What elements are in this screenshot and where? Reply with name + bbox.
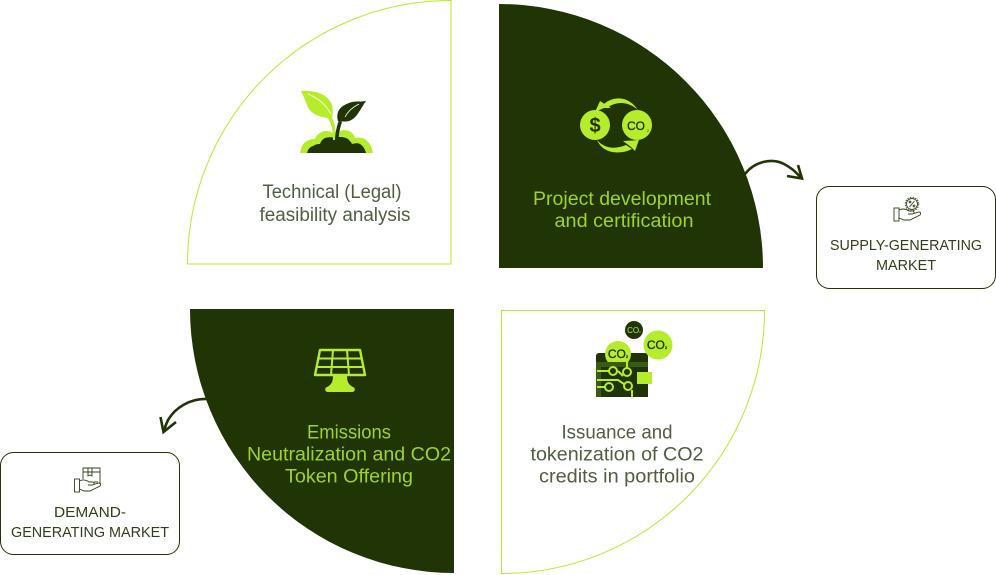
- label: supply-generating market: SUPPLY-GENERATING: [830, 238, 982, 254]
- arrow: to demand market: [160, 399, 208, 432]
- panel: project development: [499, 4, 763, 268]
- panel: technical feasibility: [188, 0, 451, 264]
- icon: wallet circuit with CO2 bubbles: CO2: [627, 326, 641, 335]
- icon: dollar and CO2 cycle: CO: [627, 119, 645, 133]
- icon: dollar and CO2 cycle: 2: [647, 128, 650, 133]
- panel text: issuance and tokenization: Issuance and: [562, 422, 672, 444]
- icon: wallet circuit with CO2 bubbles: CO2: [647, 338, 668, 352]
- panel text: technical feasibility: [260, 182, 410, 226]
- icon: hand with percent badge: [894, 197, 921, 221]
- label: supply-generating market: MARKET: [876, 258, 936, 274]
- panel text: issuance and tokenization: [530, 422, 704, 488]
- panel text: issuance and tokenization: credits in portfolio: [539, 466, 695, 488]
- panel text: project development: [533, 189, 712, 232]
- panel text: emissions neutralization: Neutralization and CO2: [247, 444, 451, 466]
- label: demand-generating market: GENERATING MARKET: [11, 525, 169, 541]
- panel text: technical feasibility: feasibility analysis: [260, 205, 410, 226]
- panel text: technical feasibility: Technical (Legal): [262, 182, 402, 203]
- icon: seedling: [300, 91, 373, 153]
- icon: hand with box: [74, 468, 101, 492]
- arrow: to supply market: [745, 161, 802, 178]
- panel: demand-generating market: [0, 452, 180, 554]
- panel text: project development: and certification: [554, 211, 694, 232]
- panel: issuance and tokenization: [502, 310, 764, 574]
- icon: dollar and CO2 cycle: $: [589, 115, 601, 137]
- label: supply-generating market: [830, 238, 982, 274]
- label: demand-generating market: DEMAND-: [54, 505, 126, 521]
- panel text: emissions neutralization: Emissions: [307, 422, 391, 444]
- panel: supply-generating market: [816, 186, 996, 288]
- panel text: issuance and tokenization: tokenization of CO2: [530, 444, 704, 466]
- panel text: emissions neutralization: Token Offering: [285, 466, 413, 488]
- icon: wallet circuit with CO2 bubbles: CO2: [608, 347, 629, 361]
- panel text: project development: Project development: [533, 189, 712, 210]
- panel: emissions neutralization: [190, 309, 454, 573]
- label: demand-generating market: [11, 505, 169, 541]
- icon: wallet circuit with CO2 bubbles: [596, 321, 672, 397]
- panel text: emissions neutralization: [247, 422, 451, 488]
- icon: dollar and CO2 cycle: [580, 98, 652, 152]
- icon: solar panel: [315, 350, 365, 392]
